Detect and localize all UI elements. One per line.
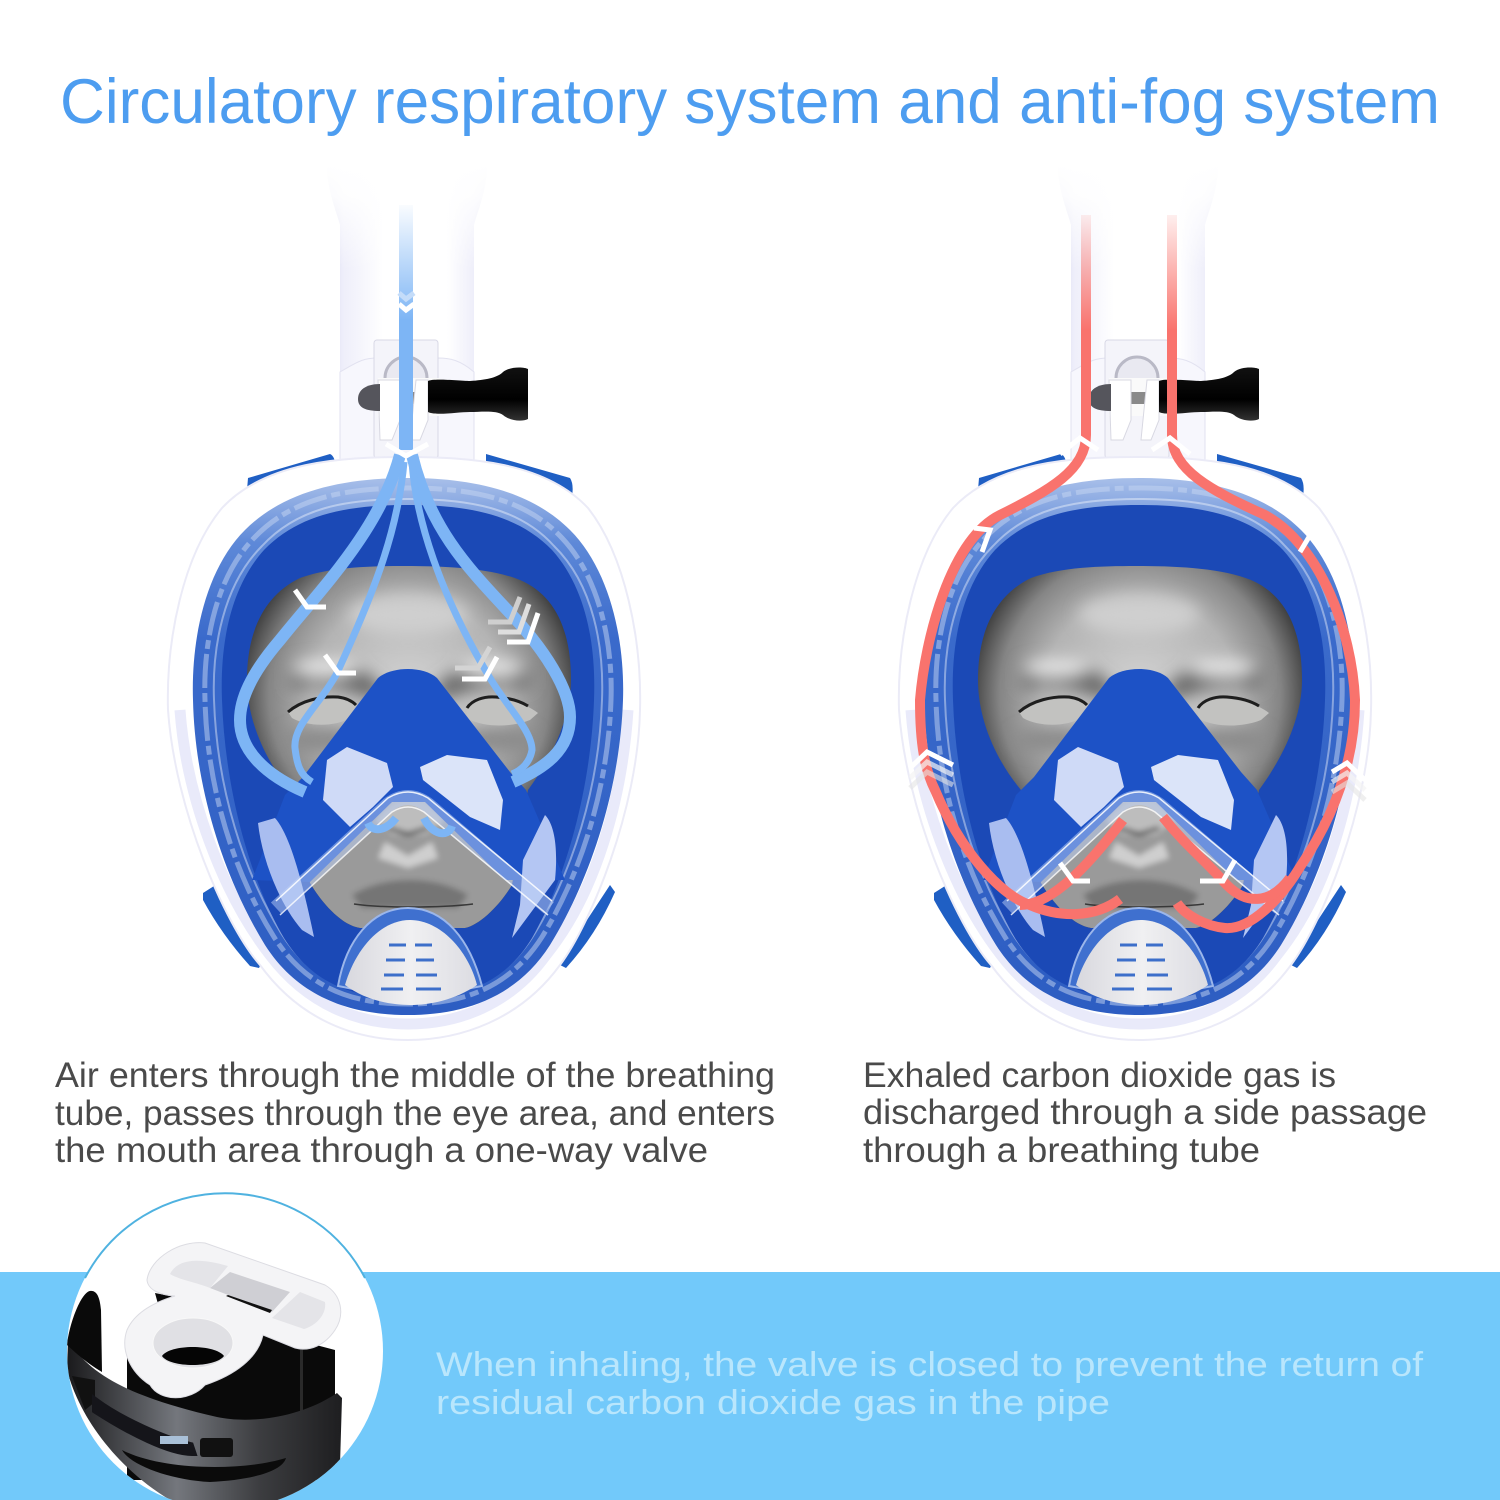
side straps — [203, 885, 615, 968]
caption: exhale: discharged through a side passage — [863, 1093, 1427, 1132]
caption: exhale: through a breathing tube — [863, 1131, 1260, 1170]
clear crossing frame — [276, 792, 552, 915]
outer left air branch — [240, 455, 400, 792]
bolt nut — [358, 384, 380, 411]
panel: right mask body (exhale) — [899, 160, 1371, 1040]
mouth line — [354, 904, 473, 907]
top straps — [247, 454, 573, 500]
brow shadows — [282, 595, 538, 752]
circular valve inset — [67, 1193, 383, 1500]
footer note: When inhaling, the valve is closed to prevent the return of — [436, 1346, 1424, 1384]
eyes — [288, 697, 538, 726]
exhaust flow lines (exhale) — [920, 215, 1355, 928]
left exhaust channel — [920, 215, 1120, 914]
shell — [168, 457, 640, 1040]
slot recess — [170, 1261, 228, 1288]
inner left air branch — [295, 462, 404, 782]
nose and oral mask — [252, 669, 565, 882]
lens outer clear band — [193, 478, 623, 1015]
air flow lines (inhale) — [240, 205, 570, 833]
right nose branch — [1163, 817, 1290, 899]
exhaust chevrons — [910, 438, 1365, 881]
lens inner blue skirt — [222, 505, 594, 998]
caption: inhale: tube, passes through the eye area, and enters — [55, 1094, 775, 1133]
clear band texture — [205, 488, 611, 1004]
thumbscrew — [428, 367, 528, 421]
valve housing — [127, 1325, 335, 1480]
face window — [240, 560, 580, 935]
chin vent surround — [338, 908, 482, 1000]
shell shading — [180, 710, 628, 1024]
title: Circulatory respiratory system and anti-fog system — [60, 67, 1440, 137]
nostril crescents — [368, 818, 452, 833]
right exhaust channel — [1172, 215, 1355, 928]
caption: exhale — [863, 1056, 1427, 1170]
outer right air branch — [412, 455, 570, 782]
inner right air branch — [412, 462, 532, 774]
chin vent — [345, 920, 477, 1005]
camera mount — [374, 340, 440, 458]
caption: inhale: Air enters through the middle of the breathing — [55, 1056, 775, 1095]
central air channel — [399, 205, 413, 450]
footer note — [436, 1346, 1424, 1422]
rectangular port — [210, 1272, 290, 1312]
breathing tube — [320, 160, 495, 470]
lower face — [300, 798, 520, 935]
footer note: residual carbon dioxide gas in the pipe — [436, 1384, 1110, 1422]
vent slots — [381, 945, 441, 989]
air chevrons — [295, 293, 538, 679]
round port — [153, 1318, 233, 1368]
caption: inhale: the mouth area through a one-way valve — [55, 1131, 708, 1170]
caption: inhale — [55, 1056, 775, 1170]
caption: exhale: Exhaled carbon dioxide gas is — [863, 1056, 1336, 1095]
fog patch right — [420, 755, 503, 830]
side panel right — [512, 815, 556, 938]
blue footer band — [0, 1272, 1500, 1500]
panel: left mask body (inhale) — [168, 160, 640, 1040]
black band — [67, 1340, 342, 1500]
band slots — [72, 1376, 95, 1410]
left upright — [67, 1291, 102, 1372]
silicone valve gasket — [125, 1243, 341, 1398]
fog patch left — [323, 747, 393, 827]
left nose branch — [1020, 820, 1123, 905]
side panel left — [258, 818, 314, 937]
